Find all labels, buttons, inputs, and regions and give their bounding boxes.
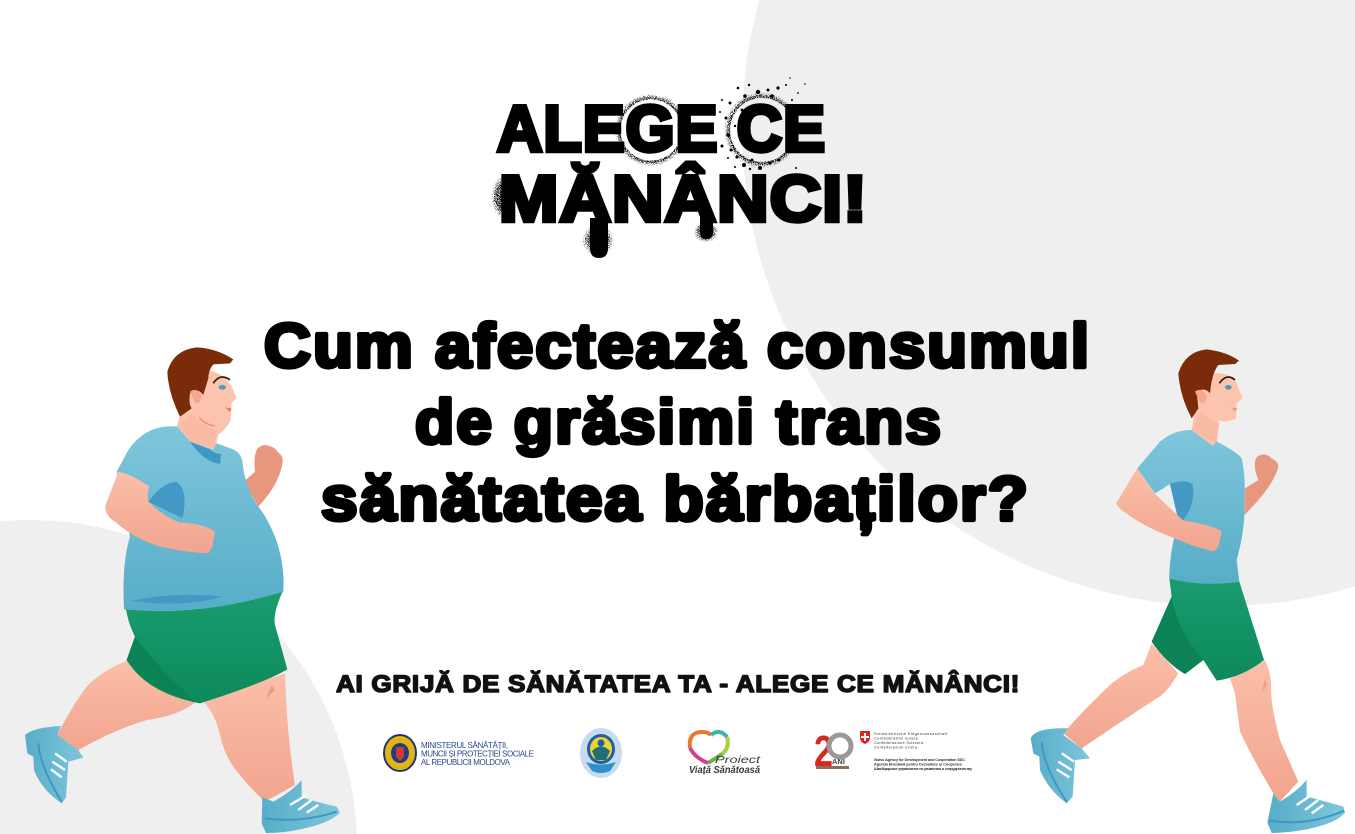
back leg: [57, 660, 197, 750]
logo: ministry of health: MUNCII ȘI PROTECȚIEI SOCIALE: [421, 750, 534, 758]
logo: swiss agency: Confederazione Svizzera: [874, 741, 924, 745]
ear: [1195, 390, 1207, 403]
logo: proiect viata sanatoasa: [689, 732, 761, 776]
shorts: [1152, 578, 1264, 681]
ear: [190, 390, 202, 403]
logo: swiss agency: Schweizerische Eidgenossenschaft: [874, 732, 948, 736]
logo: public health agency: [580, 728, 622, 778]
back leg: [1063, 643, 1178, 748]
background circle bottom left: [0, 520, 357, 834]
logo: proiect viata sanatoasa: Proiect: [715, 754, 761, 766]
logo: swiss agency: Confederaziun svizra: [874, 746, 918, 750]
face details: [213, 377, 232, 412]
figure: fit runner: [1031, 349, 1345, 833]
main question heading: [264, 312, 1091, 534]
neck and head: [1192, 373, 1242, 445]
hair: [167, 347, 233, 417]
front shoe: [1267, 780, 1345, 833]
back shoe: [25, 726, 83, 803]
logo: 20 years swiss cooperation: [814, 727, 851, 776]
logo: 20 years swiss cooperation: ANI: [832, 757, 845, 766]
front leg: [204, 673, 295, 802]
main question heading: sănătatea bărbaților?: [321, 465, 1030, 534]
front arm: [1116, 468, 1222, 552]
figure: overweight runner: [25, 347, 340, 833]
face details: [1219, 377, 1237, 411]
front arm: [105, 472, 215, 553]
neck and head: [177, 370, 237, 449]
shorts: [126, 592, 287, 703]
logo: 20 years swiss cooperation: 2: [814, 727, 833, 776]
logo: swiss agency: Swiss Agency for Development and Cooperation SDC: [874, 758, 965, 762]
shirt: [117, 426, 284, 611]
logo: swiss agency: [860, 731, 973, 771]
logo title: Alege ce mănânci: ALEGE CE: [497, 92, 826, 165]
front leg: [1230, 660, 1298, 802]
logo: swiss agency: Швейцарское управление по развитию и сотрудничеству: [874, 767, 973, 771]
logo: swiss agency: Agenția Elvețiană pentru Dezvoltare și Cooperare: [874, 762, 962, 766]
background circle top right: [742, 0, 1355, 606]
main question heading: de grăsimi trans: [415, 388, 943, 457]
logo title: Alege ce mănânci: MĂNÂNCI!: [499, 162, 868, 235]
back shoe: [1031, 728, 1090, 803]
front shoe: [262, 780, 340, 833]
logo: proiect viata sanatoasa: Viață Sănătoasă: [689, 764, 760, 776]
logo: ministry of health: [384, 735, 534, 771]
logo: swiss agency: Confédération suisse: [874, 736, 918, 740]
hair: [1178, 349, 1239, 418]
shirt: [1137, 430, 1245, 584]
back arm: [1244, 455, 1278, 515]
logo: ministry of health: AL REPUBLICII MOLDOVA: [421, 758, 511, 767]
logo: ministry of health: MINISTERUL SĂNĂTĂȚII,: [421, 741, 508, 750]
logo title: Alege ce mănânci: [484, 77, 868, 266]
main question heading: Cum afectează consumul: [264, 312, 1091, 381]
back arm: [244, 445, 283, 507]
tagline: AI GRIJĂ DE SĂNĂTATEA TA - ALEGE CE MĂNÂNCI!: [336, 670, 1020, 698]
